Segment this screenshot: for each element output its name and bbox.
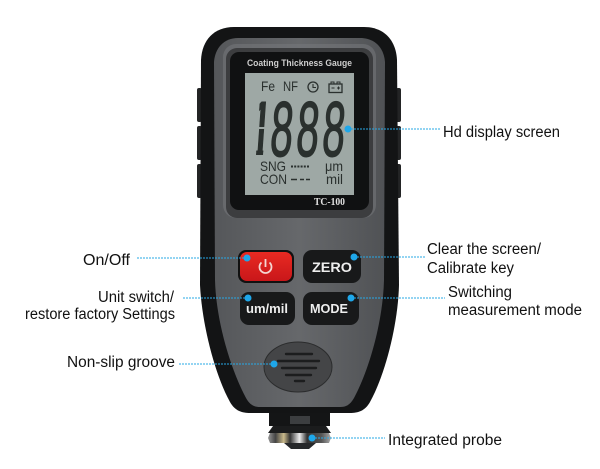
LCD top indicators: NF (283, 78, 298, 94)
callout: Clear the screen / Calibrate key: Clear the screen/ (427, 241, 542, 258)
callout: On/Off: On/Off (83, 252, 131, 269)
um/mil button: um/mil (246, 302, 288, 316)
callout: Hd display screen: Hd display screen (443, 124, 560, 141)
LCD top indicators (261, 78, 342, 94)
callout: Switching measurement mode (348, 284, 582, 319)
bezel title: Coating Thickness Gauge (247, 58, 352, 69)
MODE button: MODE (310, 301, 348, 316)
LCD main reading: 1 (244, 86, 278, 175)
callout: Hd display screen (344, 124, 560, 141)
power button (238, 250, 294, 283)
LCD lower indicators: mil (326, 171, 343, 187)
model label: TC-100 (314, 197, 345, 208)
LCD top indicators: Fe (261, 78, 275, 94)
LCD panel (244, 73, 354, 195)
callout: Unit switch / restore factory Settings: Unit switch/ (98, 289, 175, 306)
ZERO button: ZERO (312, 259, 352, 275)
LCD main reading: 8 (320, 87, 348, 174)
callout: Integrated probe (308, 432, 502, 449)
callout: Switching measurement mode: Switching (448, 284, 512, 301)
grey faceplate (214, 38, 385, 407)
callout: Clear the screen / Calibrate key: Calibrate key (427, 260, 514, 277)
side grips (197, 88, 401, 198)
bezel surround (223, 44, 376, 218)
LCD lower indicators: CON (260, 171, 287, 187)
device: coating thickness gauge (197, 27, 401, 449)
LCD main reading (256, 100, 344, 158)
MODE button (303, 292, 359, 325)
non-slip groove (264, 342, 332, 392)
callout: Switching measurement mode: measurement mode (448, 302, 582, 319)
um/mil button (240, 292, 295, 325)
LCD lower indicators: SNG (260, 158, 286, 174)
probe (268, 410, 331, 449)
screen bezel (230, 52, 369, 210)
callout: Clear the screen / Calibrate key (350, 241, 542, 277)
LCD main reading: 8 (294, 87, 322, 174)
callout: Non-slip groove (67, 354, 278, 371)
callout: Unit switch / restore factory Settings: restore factory Settings (25, 306, 175, 323)
callout: Non-slip groove: Non-slip groove (67, 354, 175, 371)
callout: Unit switch / restore factory Settings (25, 289, 252, 323)
black outer shell (200, 27, 399, 413)
LCD lower indicators (260, 158, 343, 187)
callout: Integrated probe: Integrated probe (388, 432, 502, 449)
ZERO button (303, 250, 361, 283)
LCD main reading: 8 (268, 87, 296, 174)
LCD lower indicators: μm (325, 158, 343, 174)
callout: On/Off (83, 252, 250, 269)
